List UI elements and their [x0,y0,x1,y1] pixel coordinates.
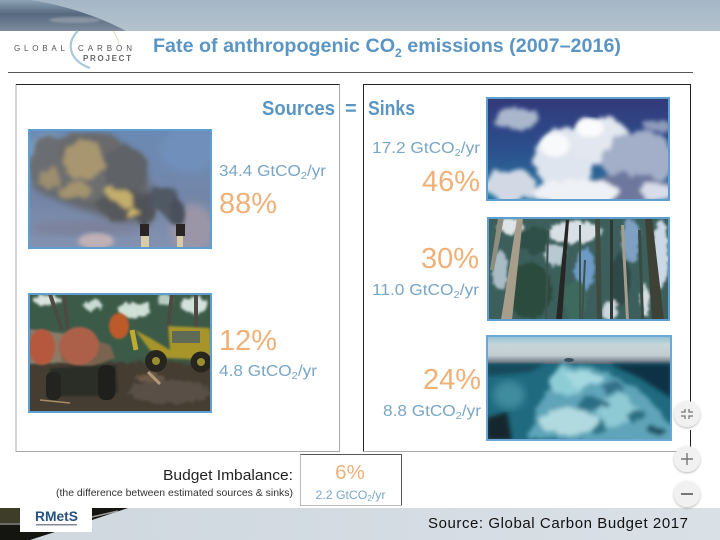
sinks value: ocean: 8.8 GtCO [383,403,448,420]
budget imbalance label: Budget Imbalance: [163,467,293,484]
sources value: land use: 2 [292,371,298,382]
sinks value: ocean: 2 [456,411,462,422]
heading: sources = sinks: = [345,98,357,120]
header rule [8,72,693,73]
sinks value: land [372,140,480,198]
photo frame: smokestacks [29,130,211,248]
sources value: land use: 4.8 GtCO [219,363,284,380]
zoom control: fit [674,401,700,427]
sources value: fossil: 88% [219,188,277,220]
logo: Global Carbon Project: CARBON [78,44,132,53]
photo: smokestacks [30,131,210,247]
logo: Global Carbon Project [14,31,132,68]
source note: Source: Global Carbon Budget 2017 [428,515,688,532]
photo: ocean wave [487,336,675,445]
sinks value: ocean: /yr [462,403,481,420]
budget imbalance box: 6% [335,461,365,484]
sources value: fossil [219,163,326,220]
sinks value: land: /yr [461,140,480,157]
photo: forest [488,218,669,320]
sinks value: ocean: 24% [423,364,481,396]
sources value: land use: 12% [219,325,277,357]
title: emissions (2007–2016) [402,35,621,57]
panel: sinks [364,84,690,452]
zoom control: plus [674,446,700,472]
logo: RMetS: RMetS [35,509,78,524]
title: Fate of anthropogenic CO [153,35,392,57]
photo frame: clouds [487,98,669,200]
top banner [0,0,720,31]
sources value: fossil: /yr [307,163,326,180]
photo frame: logging [29,294,211,412]
sources value: land use: /yr [298,363,317,380]
logo: RMetS [20,508,92,532]
sinks value: forest: 30% [421,243,479,275]
sinks value: land: 2 [455,148,461,159]
photo frame: ocean wave [487,336,671,440]
photo frame: forest [488,218,669,320]
sinks value: forest: 11.0 GtCO [372,282,445,299]
bottom band [0,508,720,540]
logo: Global Carbon Project: GLOBAL [14,44,66,53]
sinks value: land: 17.2 GtCO [372,140,446,157]
sinks value: forest: 2 [454,290,460,301]
heading: sources = sinks [262,98,415,120]
sources value: fossil: 34.4 GtCO [219,163,293,180]
budget imbalance box: /yr [372,488,386,502]
zoom control: minus [674,481,700,507]
sinks value: land: 46% [422,166,480,198]
sources value: fossil: 2 [301,171,307,182]
sinks value: ocean [383,364,481,422]
sinks value: forest [372,243,479,301]
photo: logging [25,294,215,416]
budget imbalance box [300,454,402,506]
sinks value: forest: /yr [460,282,479,299]
budget imbalance label: (the difference between estimated sources & sinks) [56,487,293,499]
budget imbalance box: 2.2 GtCO [316,488,366,502]
panel: sources [16,84,340,452]
title: 2 [395,46,402,60]
heading: sources = sinks: Sinks [368,98,415,120]
budget imbalance label [56,467,293,499]
sources value: land use [219,325,317,382]
heading: sources = sinks: Sources [262,98,335,120]
budget imbalance box: 2 [367,494,372,503]
logo: Global Carbon Project: PROJECT [83,54,131,63]
photo: clouds [488,99,668,199]
